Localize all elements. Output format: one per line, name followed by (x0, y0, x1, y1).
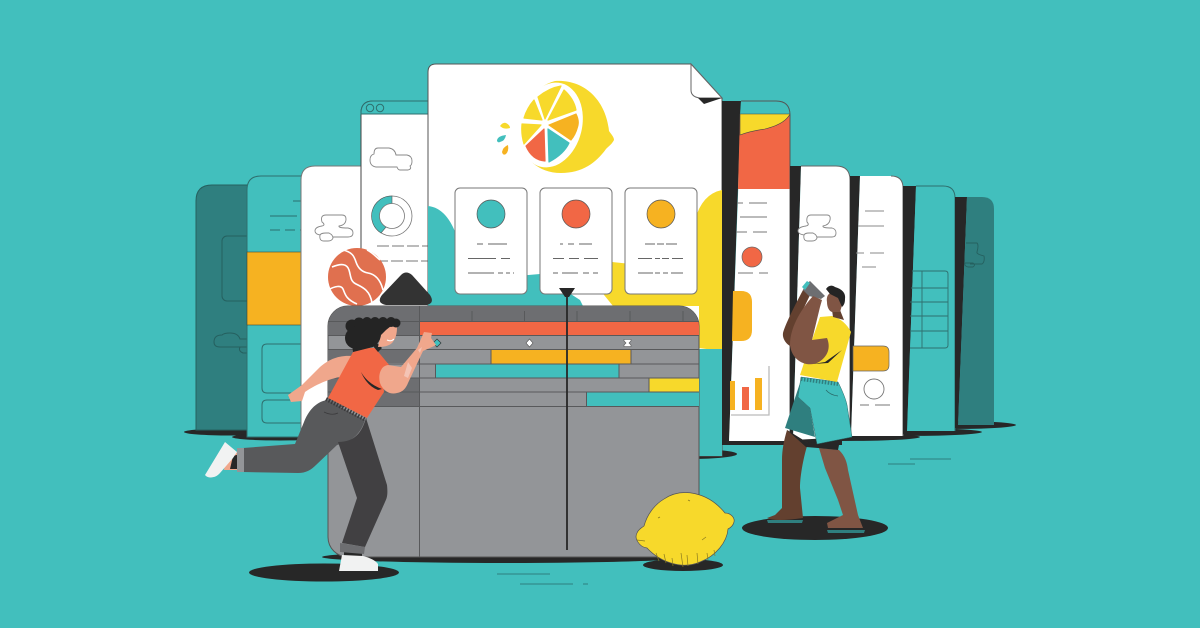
panel: white book left (301, 166, 370, 432)
teal blob (428, 206, 583, 306)
milestone: white diamond (526, 339, 533, 347)
sock (230, 454, 240, 469)
teal strip (699, 349, 722, 456)
icon: lemon slice (497, 76, 614, 174)
shorts shadow (787, 430, 840, 450)
shorts dark side (785, 383, 815, 437)
front ankle (344, 551, 362, 557)
gantt chart panel (328, 306, 700, 557)
white rind (511, 76, 591, 174)
inner rounded box (222, 236, 262, 301)
bar: orange (491, 350, 631, 364)
text lines (736, 203, 768, 273)
cloud outline (370, 148, 412, 170)
book outline (741, 101, 790, 441)
ground shadows under books (184, 421, 1016, 459)
red block (738, 114, 790, 189)
cloud outline (798, 215, 836, 241)
red dot (742, 247, 762, 267)
sleeve shadow (813, 350, 842, 364)
back arm (783, 290, 811, 348)
book cover (958, 197, 994, 425)
header band (740, 101, 790, 115)
cloud outline (214, 333, 250, 353)
text lines (638, 244, 683, 273)
book cover (907, 186, 955, 431)
card: red (540, 188, 612, 294)
smile (387, 339, 394, 341)
panel: browser card (361, 101, 440, 440)
front leg (819, 448, 863, 528)
pocket (324, 412, 338, 414)
hair (826, 286, 845, 307)
waistband (326, 399, 366, 420)
cloud outline (315, 215, 353, 241)
text lines (856, 211, 884, 267)
rear foot (224, 452, 238, 470)
red wedge (526, 129, 545, 161)
milestone: teal diamond (433, 339, 441, 347)
milestone: hourglass (624, 340, 631, 346)
window buttons (366, 104, 384, 112)
panel: main document (428, 64, 722, 456)
bar: teal right (586, 392, 700, 406)
text lines (553, 244, 598, 273)
text lines (860, 404, 890, 406)
neck shadow (373, 342, 382, 352)
back sandal (767, 520, 803, 523)
teal wedge (548, 129, 569, 162)
card: orange (625, 188, 697, 294)
book spine (955, 197, 967, 428)
panel: right book red (722, 101, 790, 445)
text lines (361, 246, 428, 261)
table grid (910, 271, 948, 348)
yellow block (247, 252, 305, 325)
big lemon shadow (643, 559, 723, 571)
circle outline (864, 379, 884, 399)
circle (477, 200, 505, 228)
juice drops (497, 123, 510, 155)
illustration: project timeline scene (184, 62, 1016, 584)
woman shadow (249, 564, 399, 582)
shorts (798, 377, 852, 444)
bar: teal (436, 364, 620, 378)
waistband (801, 379, 838, 384)
fold shadow (698, 98, 722, 104)
figure: woman running (205, 317, 436, 571)
orange wedge (549, 114, 578, 140)
face (827, 293, 843, 312)
back leg (767, 430, 808, 520)
book spine (722, 101, 741, 445)
cloud outline (965, 243, 984, 267)
icon: dark triangle marker (380, 272, 432, 305)
hair (345, 317, 400, 352)
shirt (328, 348, 390, 418)
icon: big lemon (636, 493, 734, 567)
book outline (801, 166, 850, 437)
front cuff (340, 543, 365, 554)
browser header (361, 101, 430, 114)
yellow wave (740, 114, 790, 135)
front shoe (339, 555, 378, 571)
header row (328, 306, 699, 322)
book cover (851, 176, 903, 436)
ground dashes (497, 459, 951, 584)
bar: red (419, 322, 700, 335)
circle (562, 200, 590, 228)
yellow blob (600, 190, 722, 351)
shirt (800, 316, 851, 382)
panel: right white book with lines (850, 176, 903, 439)
grid lines (328, 306, 699, 557)
back arm (288, 356, 352, 402)
today line with marker (559, 288, 575, 550)
book spine (790, 166, 801, 440)
book spine (903, 186, 916, 434)
figure: man with spyglass (767, 281, 865, 533)
panel shadow (322, 551, 688, 563)
bar: yellow (649, 378, 700, 392)
circle (647, 200, 675, 228)
neck (832, 310, 844, 320)
book spine (850, 176, 860, 439)
book outline (891, 176, 903, 436)
rear leg (243, 400, 365, 473)
panel: teal book left (247, 176, 310, 437)
rear cuff (237, 448, 244, 472)
pocket (826, 390, 838, 396)
text lines (270, 201, 305, 230)
panel: dark teal book left (196, 185, 262, 430)
donut chart (372, 196, 412, 236)
front arm (379, 332, 436, 394)
face (378, 326, 397, 347)
rear shoe (205, 442, 237, 477)
book cover (793, 166, 850, 440)
orange tab (732, 291, 752, 341)
front leg (338, 418, 387, 547)
book outline (916, 186, 955, 431)
bar chart (730, 366, 769, 415)
panel: right teal book (903, 186, 955, 434)
arm highlights (404, 347, 422, 378)
lemon body (521, 81, 614, 173)
yellow wedges (522, 86, 576, 144)
sleeve shadow (361, 372, 382, 390)
spyglass (802, 281, 825, 299)
text lines (468, 244, 514, 273)
man shadow (742, 516, 888, 540)
left column bands (328, 322, 419, 407)
orange tab (853, 346, 889, 371)
panel: right dark teal book (955, 197, 994, 428)
front arm (790, 296, 829, 364)
placeholder boxes (262, 344, 305, 423)
book cover (729, 114, 790, 441)
panel: right white book with cloud (790, 166, 850, 440)
icon: wavy red circle (328, 248, 386, 306)
document corner fold (691, 64, 722, 98)
card: teal (455, 188, 527, 294)
front sandal (827, 530, 865, 533)
